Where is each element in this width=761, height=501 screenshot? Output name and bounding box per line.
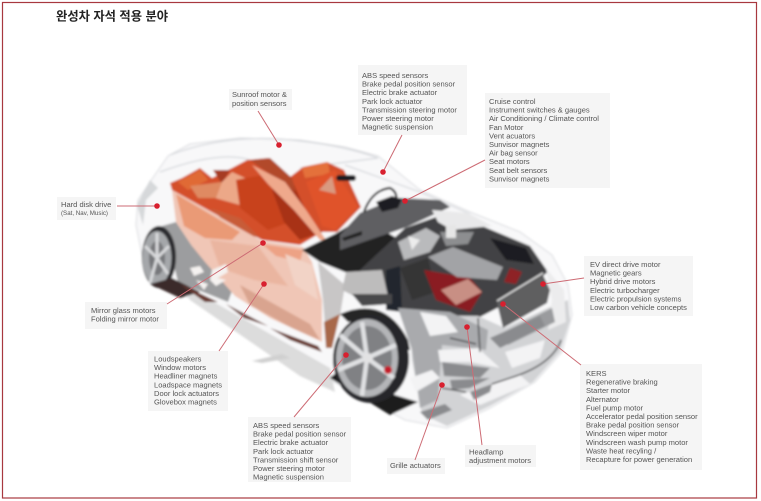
label: KERS group (580, 364, 702, 470)
cabin floor dark (302, 218, 400, 275)
engine pink part (441, 279, 482, 305)
label: loudspeakers group: Loadspace magnets (154, 380, 222, 389)
label: cruise control group: Fan Motor (489, 123, 524, 132)
leader: mirror (167, 240, 266, 304)
leader: KERS (500, 301, 581, 365)
label: loudspeakers group (148, 351, 228, 411)
label: ABS bottom group: Electric brake actuator (253, 438, 329, 447)
label: ABS bottom group (248, 417, 351, 482)
lower radiator bars (504, 308, 555, 345)
engine red block (424, 270, 482, 312)
label: loudspeakers group: Loudspeakers (154, 354, 202, 364)
label: EV group (584, 256, 693, 316)
label: KERS group: Waste heat recyling / (586, 446, 657, 455)
glass body shell (136, 138, 572, 428)
leader: headlamp (464, 324, 482, 445)
label: ABS top group: Park lock actuator (362, 97, 423, 106)
front wheel arch (340, 308, 410, 350)
label: ABS bottom group: Transmission shift sensor (253, 455, 339, 464)
label: KERS group: Windscreen wash pump motor (586, 438, 688, 447)
label: ABS bottom group: ABS speed sensors (253, 421, 320, 430)
label: ABS top group: Transmission steering motor (362, 105, 457, 114)
leader: ABS top (380, 135, 402, 175)
grey streaks on bumper (420, 316, 545, 420)
label: sunroof motor: Sunroof motor & (232, 90, 287, 99)
label: EV group: Electric turbocharger (590, 286, 660, 295)
label: KERS group: Fuel pump motor (586, 403, 644, 412)
label: cruise control group: Sunvisor magnets (489, 174, 550, 183)
rear tyre (142, 226, 176, 288)
label: loudspeakers group: Window motors (154, 363, 206, 372)
label: EV group: Hybrid drive motors (590, 277, 656, 286)
ground shadow pointer (252, 354, 290, 363)
engine cover (428, 247, 503, 280)
label: ABS top group: ABS speed sensors (362, 71, 429, 80)
label: KERS group: Windscreen wiper motor (586, 429, 668, 438)
label: headlamp adjustment motors: adjustment motors (469, 456, 531, 465)
rear lower grey body (162, 222, 236, 302)
label: hard disk drive: Hard disk drive (61, 200, 111, 209)
seat shading (178, 158, 358, 240)
dashboard (340, 198, 450, 250)
label: cruise control group: Seat belt sensors (489, 166, 548, 175)
radiator (497, 275, 550, 328)
label: mirror motors: Folding mirror motor (91, 315, 159, 324)
rear wheel (142, 226, 176, 288)
car illustration (136, 138, 572, 428)
rear rim (142, 231, 172, 285)
label: loudspeakers group: Headliner magnets (154, 372, 218, 381)
rear bench and seats orange (170, 158, 361, 245)
dark bumper lines (442, 318, 561, 392)
label: hard disk drive (57, 197, 116, 220)
leader: cruise control (402, 160, 485, 204)
label: ABS top group: Brake pedal position sensor (362, 80, 456, 89)
door shading (176, 194, 320, 340)
label: ABS bottom group: Park lock actuator (253, 447, 314, 456)
steering wheel (364, 188, 396, 212)
rear ground shadow dark (150, 278, 200, 298)
ground strip along rocker (182, 284, 335, 392)
label: KERS group: Starter motor (586, 386, 631, 395)
engine bay light mottling (342, 210, 534, 312)
label: cruise control group: Sunvisor magnets (489, 140, 550, 149)
label: cruise control group: Air bag sensor (489, 149, 538, 158)
label: headlamp adjustment motors: Headlamp (469, 448, 503, 456)
label: cruise control group (485, 93, 610, 188)
label: EV group: Low carbon vehicle concepts (590, 303, 687, 312)
label: sunroof motor (229, 89, 292, 110)
label: loudspeakers group: Glovebox magnets (154, 398, 217, 406)
front wheel ground shadow (330, 365, 418, 415)
door pink panel (172, 190, 322, 342)
label: ABS top group: Power steering motor (362, 114, 434, 123)
leader: ABS bottom (294, 352, 349, 417)
label: sunroof motor: position sensors (232, 99, 287, 108)
leader: hard disk (117, 203, 160, 209)
mirror white specks (190, 264, 228, 290)
label: KERS group: Accelerator pedal position sensor (586, 412, 698, 421)
steering hub (376, 196, 402, 212)
label: KERS group: Brake pedal position sensor (586, 421, 680, 430)
rear view mirror (336, 175, 356, 181)
radiator bar (497, 273, 543, 301)
label: ABS top group: Electric brake actuator (362, 88, 438, 97)
front wheel (333, 315, 409, 403)
label: ABS top group: Magnetic suspension (362, 123, 433, 132)
title: 완성차 자석 적용 분야 (56, 10, 168, 24)
light streaks on bumper (410, 312, 545, 405)
label: cruise control group: Cruise control (489, 97, 536, 106)
label: mirror motors (85, 302, 167, 329)
label: EV group: Electric propulsion systems (590, 294, 682, 303)
label: ABS top group (358, 65, 467, 135)
front rim (336, 319, 398, 397)
leader: EV (540, 278, 584, 287)
leader: sunroof (258, 111, 282, 148)
label: EV group: Magnetic gears (590, 269, 642, 278)
engine bay base (360, 212, 548, 318)
leader: grille (415, 382, 445, 460)
callout leaders and dots (117, 111, 584, 460)
rear glass tail (137, 180, 158, 225)
label: KERS group: Regenerative braking (586, 378, 658, 387)
front white panel (546, 268, 566, 330)
front grey fender (398, 308, 488, 408)
label: KERS group: Recapture for power generation (586, 455, 692, 464)
label: loudspeakers group: Door lock actuators (154, 389, 219, 398)
label: mirror motors: Mirror glass motors (91, 306, 156, 315)
label: cruise control group: Vent acuators (489, 131, 535, 140)
label: cruise control group: Seat motors (489, 157, 530, 166)
label: headlamp adjustment motors (465, 445, 536, 467)
label: EV group: EV direct drive motor (590, 260, 661, 269)
label: ABS bottom group: Magnetic suspension (253, 473, 324, 482)
front bumper base (410, 300, 570, 426)
brake caliper (384, 366, 392, 374)
label: cruise control group: Air Conditioning / Climate control (489, 114, 599, 123)
label: grille actuators: Grille actuators (390, 461, 441, 470)
label: cruise control group: Instrument switches & gauges (489, 106, 590, 115)
label: ABS bottom group: Brake pedal position sensor (253, 430, 347, 439)
arch orange detail (324, 314, 340, 348)
hub (363, 353, 373, 363)
side right panel light (318, 262, 345, 326)
leader: loudspeakers (219, 281, 267, 351)
label: hard disk drive: (Sat, Nav, Music) (61, 210, 108, 217)
label: grille actuators (387, 458, 445, 474)
rocker dark streaks (180, 284, 322, 352)
label: KERS group: KERS (586, 369, 607, 378)
dash slot (342, 231, 362, 241)
front tyre (333, 315, 409, 403)
roof highlights (160, 138, 470, 214)
label: KERS group: Alternator (586, 395, 619, 404)
label: ABS bottom group: Power steering motor (253, 464, 325, 473)
